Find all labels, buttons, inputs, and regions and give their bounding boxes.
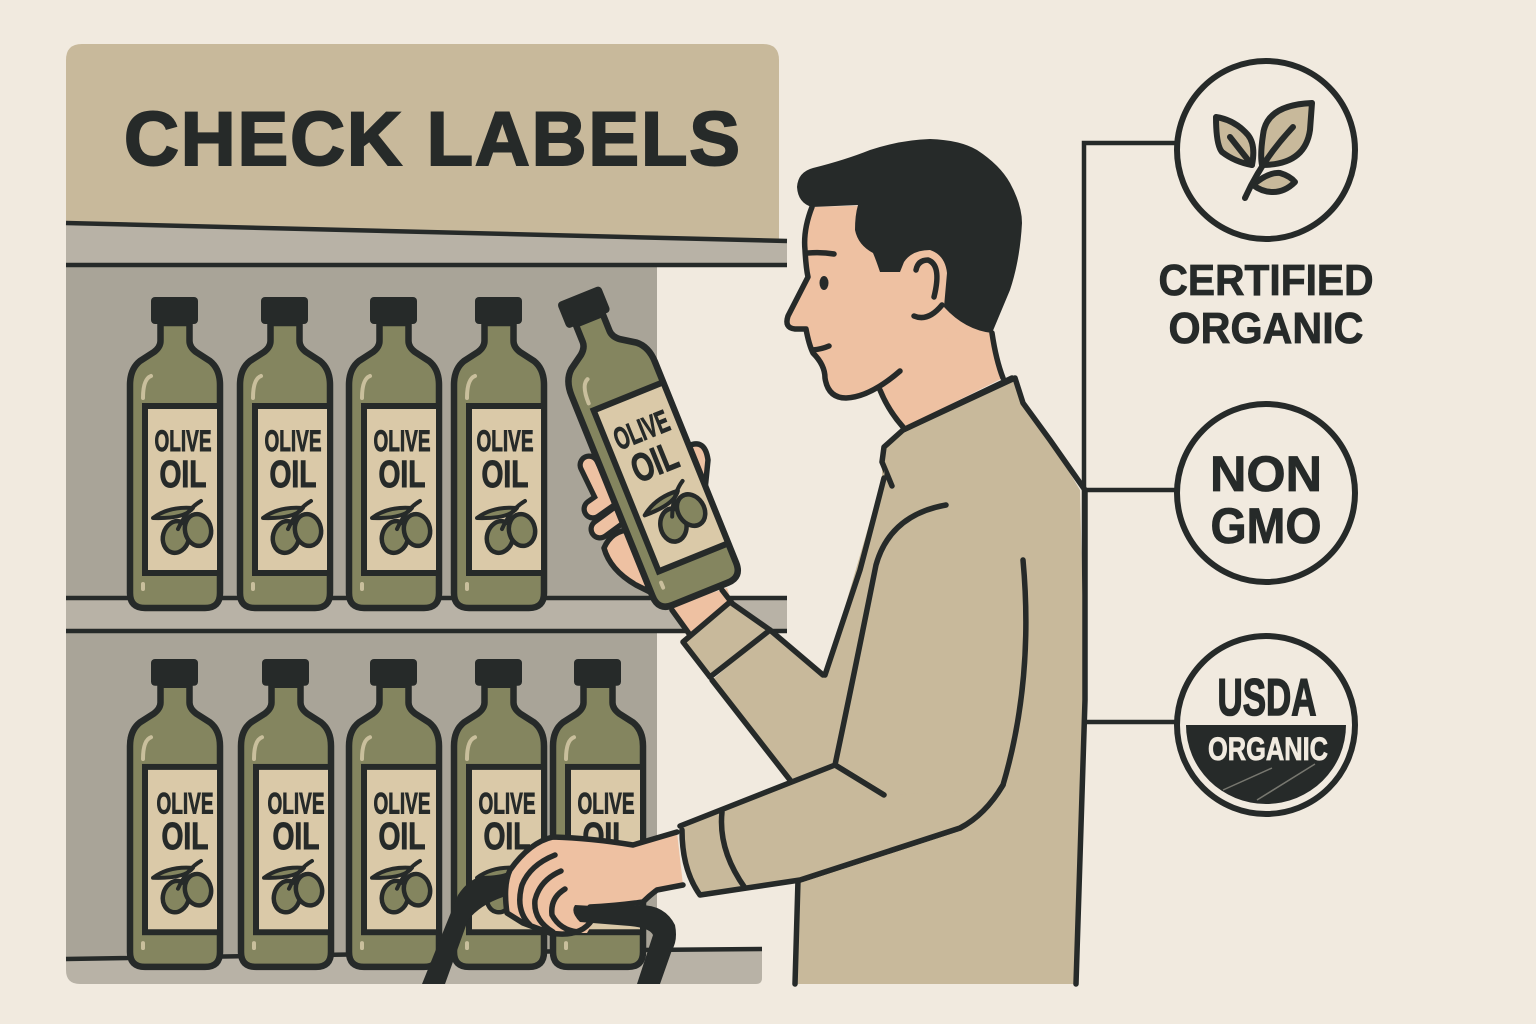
shirt torso [795,378,1085,984]
bottles: top row [130,297,544,608]
bottle 4: OLIVE [476,425,534,458]
top shelf edge [66,225,787,265]
shopping cart left arm [422,877,512,984]
bottle 6: OIL [162,816,209,858]
bottle 6 [130,659,220,967]
bottle 1 [130,297,220,608]
bottle 2 [240,297,330,608]
badge: usda organic [1177,636,1355,814]
bottle 10 [553,659,643,967]
bottle 7: OIL [273,816,320,858]
ear [914,260,942,318]
bottle 2: OLIVE [264,425,322,458]
thumb [688,444,708,490]
fingers [589,465,626,529]
bottle 1: OIL [160,454,206,496]
lower sleeve [680,765,1000,897]
bottles: bottom row [130,659,643,967]
connector lines [1034,143,1176,722]
hair [797,139,1022,333]
bottle 4 [454,297,544,608]
held bottle with hand [537,277,770,677]
badge: certified organic [1158,61,1374,305]
badge: non gmo: GMO [1210,498,1322,554]
back wall [66,262,657,958]
eye and brow [808,253,834,350]
bottle 3 [349,297,439,608]
hand on cart [506,832,683,934]
bottle 7 [241,659,331,967]
palm [604,530,650,592]
bottle 3: OLIVE [374,425,430,458]
badge: non gmo: NON [1210,446,1322,502]
badge label: CERTIFIED [1158,256,1374,305]
bottle 3: OIL [378,454,426,496]
held olive oil bottle: OIL [625,434,685,492]
shirt fold lines [800,505,1026,880]
bottle 1: OLIVE [154,425,212,458]
person [680,139,1085,984]
middle shelf [66,598,787,630]
badge: usda organic: USDA [1218,669,1316,727]
bottom shelf [66,948,762,984]
bottle 9: OLIVE [478,788,536,820]
bottle 10: OIL [582,816,630,858]
badge: non gmo [1177,404,1355,582]
panel: store shelf [66,44,787,984]
raised sleeve [712,470,885,785]
bottle 9 [454,659,544,967]
bottle 9: OIL [483,816,530,858]
hand behind bottle [589,444,732,635]
raised cuff [683,602,770,677]
held olive oil bottle: OLIVE [609,404,675,457]
bottle 8 [349,659,439,967]
icon: leaf sprig [1216,103,1312,198]
title: CHECK LABELS [124,97,740,182]
face [787,205,960,398]
neck [880,300,1003,428]
shelf sign header [66,44,779,241]
bottle 7: OLIVE [268,788,324,820]
bottle 10: OLIVE [578,788,635,820]
bottle 6: OLIVE [157,788,214,820]
badge: usda organic: ORGANIC [1208,731,1328,767]
bottle 8: OIL [378,816,426,858]
bottle 4: OIL [482,454,528,496]
shopping cart handle [573,905,676,984]
bottle 2: OIL [270,454,316,496]
badge label: organic: ORGANIC [1168,304,1364,353]
bottle 8: OLIVE [374,788,431,820]
held olive oil bottle [537,277,742,611]
